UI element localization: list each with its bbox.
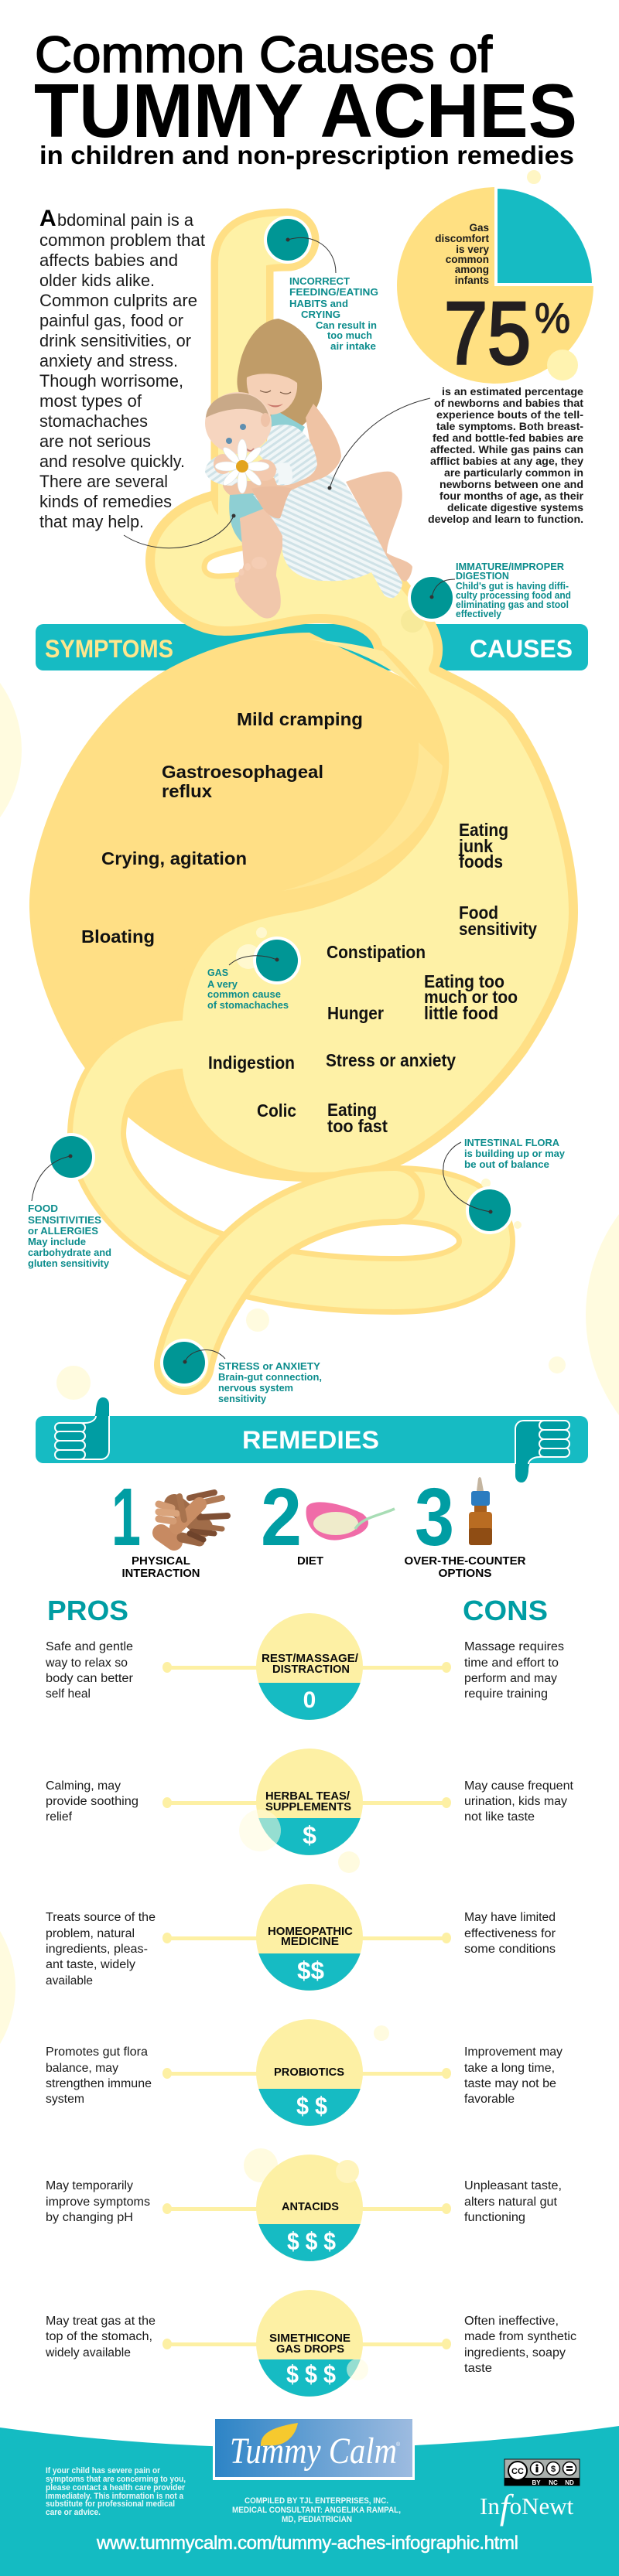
causes list: Eating too xyxy=(424,971,504,991)
remedy row: homeopathic medicine: May have limited xyxy=(464,1911,556,1924)
remedy row: probiotics: Improvement may xyxy=(464,2045,563,2059)
remedy row: herbal teas xyxy=(46,1749,574,1855)
causes list: Hunger xyxy=(327,1003,384,1023)
remedy row: probiotics: taste may not be xyxy=(464,2077,556,2090)
toes of near foot xyxy=(234,557,267,583)
teal top of girl xyxy=(267,408,305,441)
remedy option 1: physical interaction xyxy=(111,1472,227,1580)
remedy row: probiotics: PROBIOTICS xyxy=(274,2066,344,2079)
photo illustration: girl holding baby xyxy=(205,319,412,619)
callout: stress or anxiety: STRESS or ANXIETY xyxy=(218,1360,320,1372)
heading: cons: CONS xyxy=(463,1595,548,1626)
callout: immature digestion: effectively xyxy=(456,608,502,619)
remedy row: probiotics: favorable xyxy=(464,2093,515,2106)
disclaimer text xyxy=(46,2466,186,2517)
remedy row: simethicone gas drops: GAS DROPS xyxy=(276,2342,344,2356)
icon: creative commons badge: NC xyxy=(549,2479,558,2486)
far leg of girl xyxy=(346,472,412,582)
intro text block: that may help. xyxy=(39,512,144,531)
remedy row: herbal teas: SUPPLEMENTS xyxy=(265,1800,351,1813)
callout: food sensitivities: or ALLERGIES xyxy=(28,1225,98,1237)
callout: immature digestion: eliminating gas and stool xyxy=(456,599,569,610)
intro text block xyxy=(39,206,205,531)
statistic paragraph: affected. While gas pains can xyxy=(430,443,583,455)
remedy row: herbal teas: urination, kids may xyxy=(464,1795,567,1808)
causes list: foods xyxy=(459,851,503,872)
remedy row: homeopathic medicine xyxy=(46,1884,556,1991)
intro text block: and resolve quickly. xyxy=(39,452,185,471)
statistic paragraph: experience bouts of the tell- xyxy=(436,408,583,421)
callout: immature digestion: DIGESTION xyxy=(456,570,509,582)
callout: incorrect feeding: air intake xyxy=(330,340,376,352)
causes list xyxy=(326,820,537,1136)
remedy row: homeopathic medicine: ant taste, widely xyxy=(46,1958,135,1971)
website url: www.tummycalm.com/tummy-aches-infographic.html xyxy=(96,2533,518,2554)
intro text block: most types of xyxy=(39,391,142,411)
callout: gas: GAS xyxy=(207,967,228,978)
pie chart: 75 percent: % xyxy=(535,294,570,342)
icon: creative commons badge xyxy=(504,2459,580,2486)
callout: incorrect feeding: CRYING xyxy=(301,309,340,320)
heading: pros: PROS xyxy=(47,1595,128,1626)
intro text block: Common culprits are xyxy=(39,291,197,310)
callout: stress or anxiety: Brain-gut connection, xyxy=(218,1371,322,1383)
credits text: COMPILED BY TJL ENTERPRISES, INC. xyxy=(245,2496,388,2506)
callout: immature digestion: culty processing food and xyxy=(456,589,571,601)
causes list: Stress or anxiety xyxy=(326,1050,456,1070)
remedy row: homeopathic medicine: some conditions xyxy=(464,1943,556,1956)
statistic paragraph: newborns between one and xyxy=(439,478,583,490)
remedy row: rest massage distraction: require training xyxy=(464,1687,548,1701)
logo: tummy calm xyxy=(213,2417,415,2480)
remedy row: herbal teas: not like taste xyxy=(464,1810,535,1824)
digestive tract illustration xyxy=(29,240,573,1365)
remedy row: antacids: by changing pH xyxy=(46,2211,133,2224)
statistic paragraph xyxy=(428,385,584,525)
callout: food sensitivities xyxy=(28,1203,111,1269)
callout: gas: A very xyxy=(207,978,238,990)
remedy option 2: diet: DIET xyxy=(297,1555,323,1568)
disclaimer text: immediately. This information is not a xyxy=(46,2492,184,2501)
remedy option 3: over the counter: OPTIONS xyxy=(438,1568,492,1580)
intro text block: drink sensitivities, or xyxy=(39,331,191,350)
near leg of girl xyxy=(235,509,285,619)
callout: immature digestion xyxy=(456,561,571,619)
remedy row: simethicone gas drops: Often ineffective, xyxy=(464,2315,559,2328)
remedy row: homeopathic medicine: ingredients, pleas- xyxy=(46,1943,148,1956)
icon: creative commons badge: CC xyxy=(511,2467,524,2476)
callout: incorrect feeding: too much xyxy=(327,329,372,341)
remedy row: probiotics: take a long time, xyxy=(464,2062,555,2075)
causes list: Food xyxy=(459,902,498,923)
remedy row: probiotics: $ $ xyxy=(296,2092,327,2120)
remedy row: homeopathic medicine: problem, natural xyxy=(46,1927,135,1940)
remedy option 2: diet xyxy=(261,1472,395,1568)
pie chart: 75 percent: Gas xyxy=(469,222,489,234)
remedy row: rest massage distraction: perform and may xyxy=(464,1672,557,1685)
remedy row: herbal teas: $ xyxy=(303,1821,316,1849)
causes list: little food xyxy=(424,1003,498,1023)
intro text block: painful gas, food or xyxy=(39,311,183,330)
credits text: MD, PEDIATRICIAN xyxy=(282,2515,352,2524)
remedy row: rest massage distraction: DISTRACTION xyxy=(272,1663,350,1676)
remedy row: simethicone gas drops: taste xyxy=(464,2362,492,2375)
callout: stress or anxiety: nervous system xyxy=(218,1382,293,1394)
remedy option 3: over the counter: 3 xyxy=(415,1472,454,1563)
callout: intestinal flora xyxy=(464,1137,566,1170)
baby head xyxy=(205,392,272,454)
hair of girl xyxy=(237,319,322,429)
statistic paragraph: delicate digestive systems xyxy=(447,501,583,513)
banner: symptoms and causes xyxy=(36,624,588,670)
remedy row: herbal teas: relief xyxy=(46,1810,73,1824)
pie chart: 75 percent xyxy=(397,170,593,384)
remedy row: probiotics xyxy=(46,2019,563,2126)
remedy row: simethicone gas drops xyxy=(45,2290,576,2397)
symptoms list: reflux xyxy=(162,781,212,801)
remedy row: simethicone gas drops: SIMETHICONE xyxy=(269,2332,351,2345)
symptoms list: Gastroesophageal xyxy=(162,762,323,782)
remedy row: homeopathic medicine: available xyxy=(46,1974,93,1987)
callout: incorrect feeding: Can result in xyxy=(316,319,377,331)
statistic paragraph: develop and learn to function. xyxy=(428,513,583,525)
baby onesie torso and sleeve xyxy=(255,425,317,485)
symptoms list: Crying, agitation xyxy=(101,848,247,868)
intro text block: older kids alike. xyxy=(39,271,155,290)
remedy row: probiotics: system xyxy=(46,2093,84,2106)
callout: stress or anxiety xyxy=(218,1360,322,1404)
intro text block: anxiety and stress. xyxy=(39,351,178,370)
intro text block: Though worrisome, xyxy=(39,371,183,391)
pie chart: 75 percent: 75 xyxy=(444,285,531,383)
callout: incorrect feeding xyxy=(289,275,378,352)
remedy row: rest massage distraction: way to relax so xyxy=(45,1656,128,1670)
baby hands xyxy=(214,454,232,474)
disclaimer text: please contact a health care provider xyxy=(46,2483,186,2492)
heading: symptoms: SYMPTOMS xyxy=(45,635,173,663)
intro text block: are not serious xyxy=(39,432,151,451)
daisy flower xyxy=(215,439,269,493)
footer background xyxy=(0,2426,619,2576)
left sleeve xyxy=(205,454,240,486)
title: in children and non-prescription remedies xyxy=(39,141,574,169)
intro text block: bdominal pain is a xyxy=(57,210,194,230)
callout: food sensitivities: May include xyxy=(28,1236,86,1247)
remedy row: herbal teas: provide soothing xyxy=(46,1795,139,1808)
logo: infonewt: oNewt xyxy=(510,2492,574,2520)
disclaimer text: care or advice. xyxy=(46,2508,101,2517)
statistic paragraph: tale symptoms. Both breast- xyxy=(436,420,583,432)
hand of girl on baby xyxy=(251,486,292,518)
symptoms list: Colic xyxy=(257,1100,296,1121)
symptoms list xyxy=(81,709,363,1121)
remedy row: antacids: functioning xyxy=(464,2211,525,2224)
causes list: Eating xyxy=(459,820,508,840)
logo: infonewt: In xyxy=(480,2492,500,2520)
remedy option 1: physical interaction: 1 xyxy=(111,1472,141,1563)
remedy row: antacids: Unpleasant taste, xyxy=(464,2179,562,2192)
remedy row: homeopathic medicine: HOMEOPATHIC xyxy=(268,1925,353,1938)
remedy row: simethicone gas drops: top of the stomach, xyxy=(46,2330,152,2343)
callout: immature digestion: IMMATURE/IMPROPER xyxy=(456,561,565,572)
remedy row: simethicone gas drops: ingredients, soapy xyxy=(464,2346,566,2359)
remedy row: homeopathic medicine: Treats source of the xyxy=(46,1911,156,1924)
credits text xyxy=(232,2496,401,2524)
causes list: Eating xyxy=(327,1100,377,1120)
remedy row: rest massage distraction: body can better xyxy=(46,1672,133,1685)
remedy row: rest massage distraction xyxy=(45,1613,564,1720)
remedy row: herbal teas: May cause frequent xyxy=(464,1779,574,1793)
title: Common Causes of xyxy=(35,26,493,83)
title: TUMMY ACHES xyxy=(34,68,577,153)
pie chart: 75 percent: is very xyxy=(456,244,489,255)
remedy option 2: diet: 2 xyxy=(261,1472,302,1563)
callout: immature digestion: Child's gut is having diffi- xyxy=(456,580,569,592)
disclaimer text: substitute for professional medical xyxy=(46,2499,175,2509)
remedy option 1: physical interaction: INTERACTION xyxy=(122,1568,200,1580)
remedy row: simethicone gas drops: widely available xyxy=(45,2346,131,2359)
callout: gas: common cause xyxy=(207,988,281,1000)
baby onesie legs xyxy=(253,474,402,598)
white cuff xyxy=(275,462,292,485)
icon: thumbs up xyxy=(55,1397,109,1459)
callout: food sensitivities: SENSITIVITIES xyxy=(28,1214,101,1226)
remedy row: antacids xyxy=(46,2155,562,2261)
remedy row: probiotics: Promotes gut flora xyxy=(46,2045,148,2059)
remedy row: rest massage distraction: REST/MASSAGE/ xyxy=(262,1652,359,1665)
teal cause markers xyxy=(32,216,514,1387)
callout: gas: of stomachaches xyxy=(207,999,289,1011)
disclaimer text: If your child has severe pain or xyxy=(46,2466,161,2475)
icon: bowl of food xyxy=(306,1502,395,1540)
callout: stress or anxiety: sensitivity xyxy=(218,1393,267,1404)
remedy row: probiotics: strengthen immune xyxy=(46,2077,152,2090)
statistic paragraph: is an estimated percentage xyxy=(442,385,583,397)
remedy row: simethicone gas drops: made from synthetic xyxy=(464,2330,576,2343)
remedy row: rest massage distraction: Safe and gentle xyxy=(46,1640,133,1653)
statistic paragraph: are particularly common in xyxy=(444,466,583,479)
symptoms list: Bloating xyxy=(81,926,155,947)
causes list: Constipation xyxy=(327,942,426,962)
remedy option 3: over the counter xyxy=(404,1472,526,1580)
causes list: junk xyxy=(458,836,493,856)
callout: intestinal flora: is building up or may xyxy=(464,1148,566,1159)
remedy row: rest massage distraction: self heal xyxy=(46,1687,91,1701)
symptoms list: Mild cramping xyxy=(237,709,363,729)
causes list: too fast xyxy=(327,1116,388,1136)
heading: causes: CAUSES xyxy=(470,635,573,663)
remedy row: antacids: improve symptoms xyxy=(46,2196,150,2209)
remedy option 3: over the counter: OVER-THE-COUNTER xyxy=(404,1555,526,1568)
callout: intestinal flora: be out of balance xyxy=(464,1158,549,1170)
intro text block: There are several xyxy=(39,472,168,491)
logo: tummy calm: Tummy Calm xyxy=(230,2431,397,2472)
statistic paragraph: four months of age, as their xyxy=(439,490,584,502)
remedy row: herbal teas: HERBAL TEAS/ xyxy=(265,1790,351,1803)
pale background circles xyxy=(0,635,619,2182)
remedy row: simethicone gas drops: May treat gas at the xyxy=(46,2315,156,2328)
causes list: much or too xyxy=(424,987,518,1007)
callout: food sensitivities: gluten sensitivity xyxy=(28,1257,110,1269)
intro text block: affects babies and xyxy=(39,251,178,270)
intro text block: kinds of remedies xyxy=(39,492,172,511)
icon: thumbs down xyxy=(515,1421,569,1482)
remedy option 1: physical interaction: PHYSICAL xyxy=(132,1555,190,1568)
statistic paragraph: of newborns and babies that xyxy=(434,397,583,409)
callout: incorrect feeding: FEEDING/EATING xyxy=(289,286,378,298)
remedy row: antacids: $ $ $ xyxy=(287,2227,336,2255)
intro text block: stomachaches xyxy=(39,411,148,431)
remedy row: homeopathic medicine: $$ xyxy=(297,1957,324,1984)
remedy row: antacids: alters natural gut xyxy=(464,2196,558,2209)
pie chart: 75 percent: discomfort xyxy=(435,233,489,244)
icon: dropper bottle xyxy=(469,1477,492,1545)
pie chart: 75 percent: common xyxy=(446,254,489,265)
remedy row: probiotics: balance, may xyxy=(46,2062,118,2075)
remedy row: homeopathic medicine: MEDICINE xyxy=(281,1935,339,1948)
callout: intestinal flora: INTESTINAL FLORA xyxy=(464,1137,560,1148)
intro text block: A xyxy=(39,206,56,231)
callout: food sensitivities: FOOD xyxy=(28,1203,58,1214)
callout: food sensitivities: carbohydrate and xyxy=(28,1247,111,1258)
pie chart: 75 percent: among xyxy=(455,264,489,275)
banner: remedies: REMEDIES xyxy=(242,1426,379,1454)
callout: incorrect feeding: HABITS and xyxy=(289,298,348,309)
pie chart: 75 percent: infants xyxy=(455,275,489,286)
intro text block: common problem that xyxy=(39,230,205,250)
callout: incorrect feeding: INCORRECT xyxy=(289,275,350,287)
statistic paragraph: afflict babies at any age, they xyxy=(430,455,583,467)
remedy row: antacids: May temporarily xyxy=(46,2179,133,2192)
arm of girl xyxy=(223,404,341,498)
shorts of girl xyxy=(229,493,265,546)
remedy row: rest massage distraction: 0 xyxy=(303,1687,316,1713)
causes list: sensitivity xyxy=(459,919,537,939)
icon: creative commons badge: ND xyxy=(565,2479,574,2486)
icon: creative commons badge: BY xyxy=(532,2479,541,2486)
remedy row: herbal teas: Calming, may xyxy=(46,1779,121,1793)
title xyxy=(34,26,577,169)
statistic paragraph: fed and bottle-fed babies are xyxy=(433,432,583,444)
icon: hands xyxy=(159,1493,227,1542)
credits text: MEDICAL CONSULTANT: ANGELIKA RAMPAL, xyxy=(232,2506,401,2515)
face of girl xyxy=(247,374,297,415)
disclaimer text: symptoms that are concerning to you, xyxy=(46,2475,186,2484)
icon: creative commons badge: $ xyxy=(551,2465,556,2474)
remedy row: rest massage distraction: time and effort to xyxy=(464,1656,559,1670)
callout lines xyxy=(124,398,430,548)
symptoms list: Indigestion xyxy=(208,1053,295,1073)
logo: infonewt: f xyxy=(500,2487,515,2527)
callout: gas xyxy=(207,967,289,1011)
remedy row: homeopathic medicine: effectiveness for xyxy=(464,1927,556,1940)
logo: tummy calm: ® xyxy=(396,2441,401,2448)
remedy row: rest massage distraction: Massage requires xyxy=(464,1640,564,1653)
remedy row: antacids: ANTACIDS xyxy=(282,2200,339,2213)
remedy row: simethicone gas drops: $ $ $ xyxy=(286,2360,336,2388)
banner: remedies xyxy=(36,1416,588,1463)
